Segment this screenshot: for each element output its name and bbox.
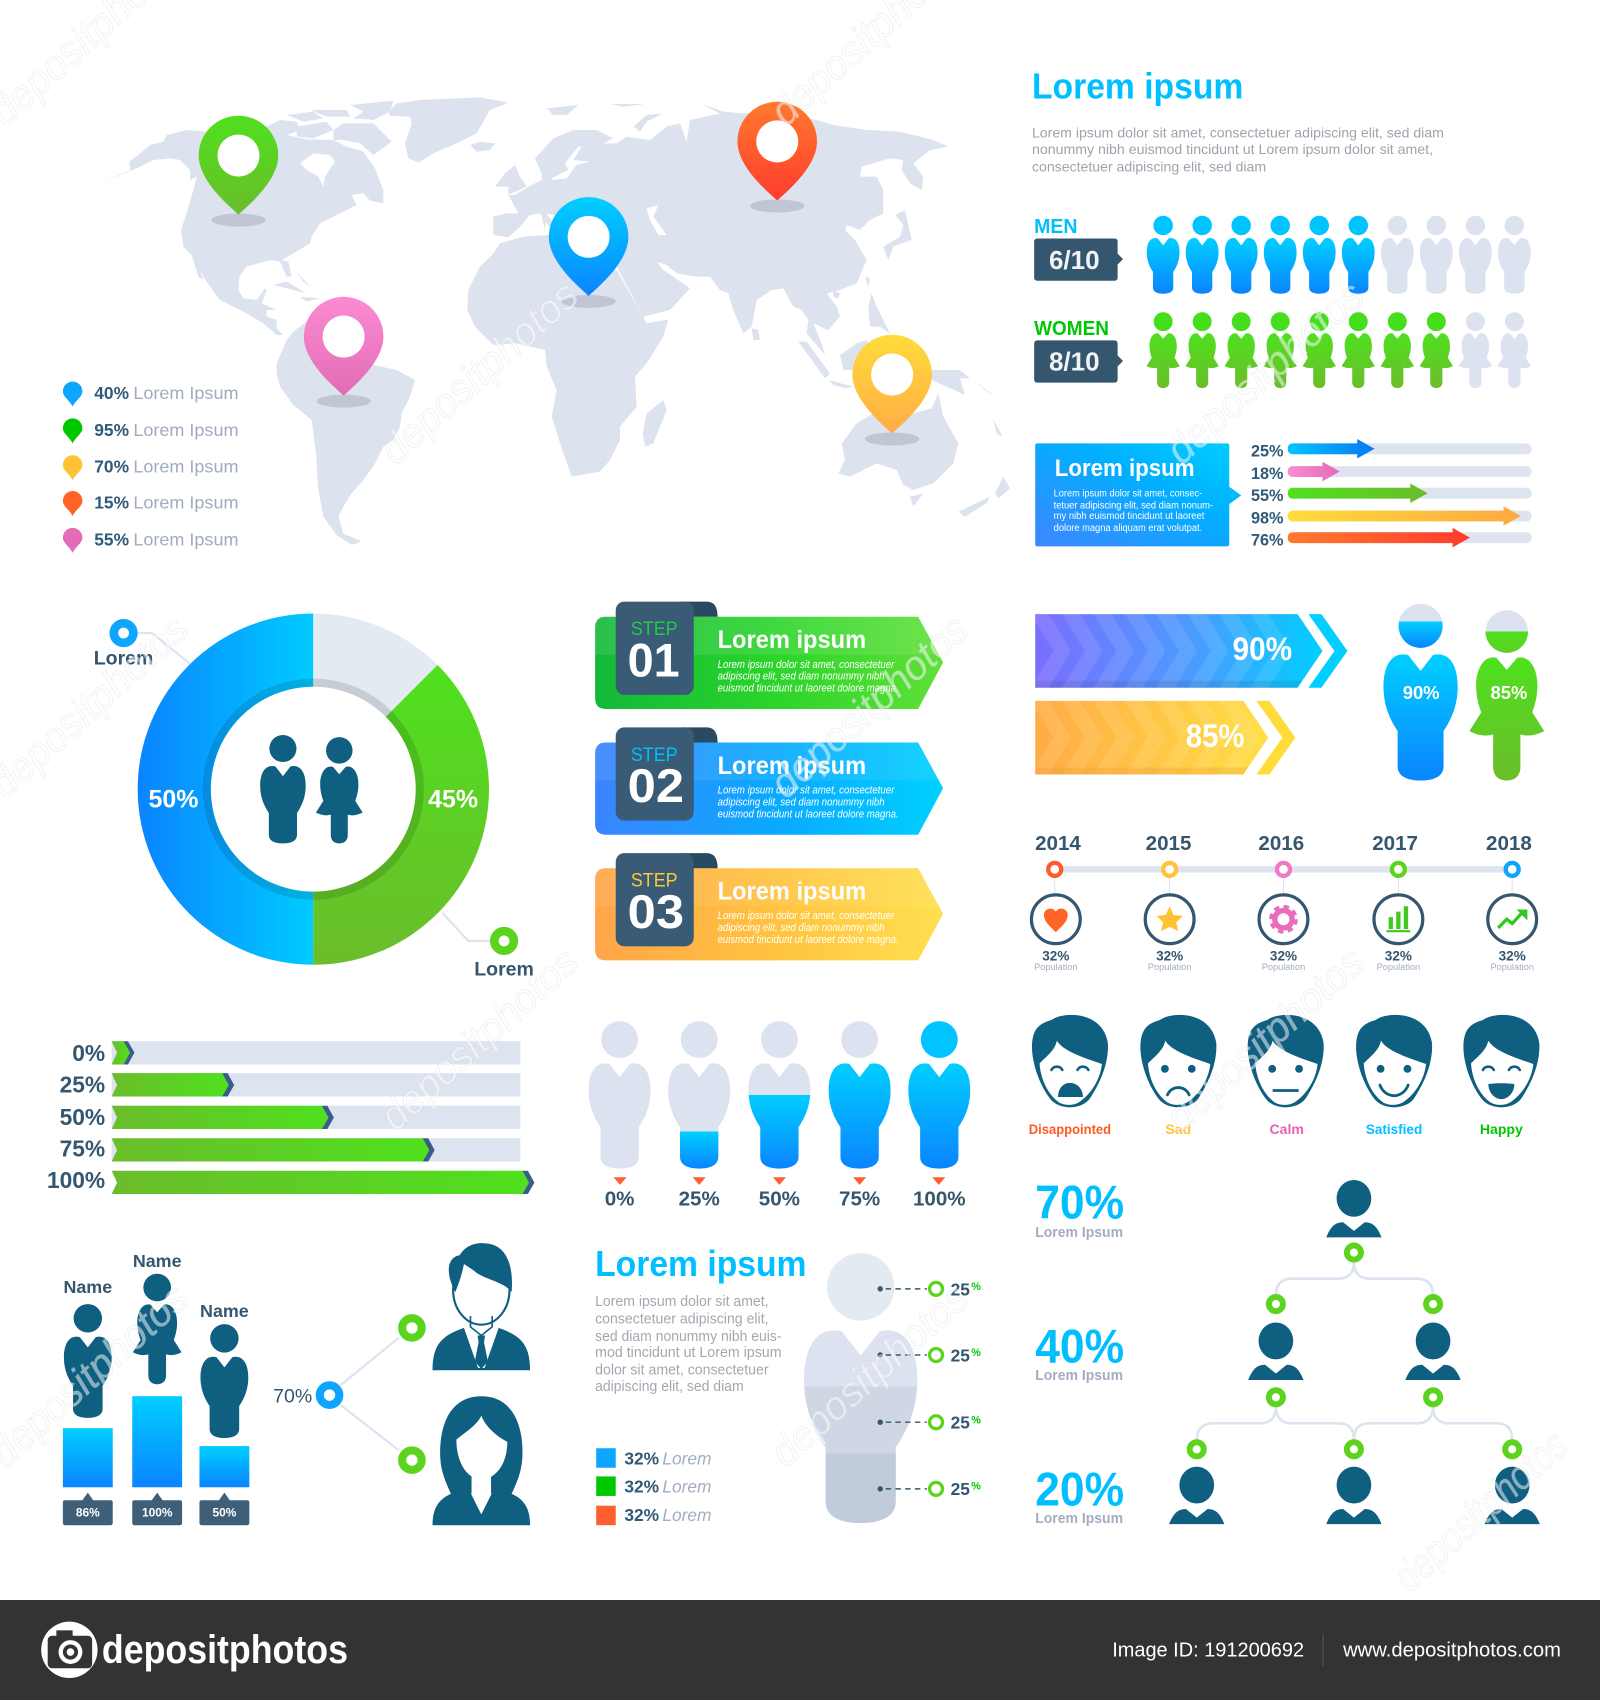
- value 85%: 85%: [1186, 718, 1245, 754]
- women icons: [1146, 312, 1531, 388]
- tab: [616, 602, 718, 695]
- label 45%: 45%: [428, 786, 478, 814]
- panel: blue callout box: [1035, 443, 1241, 546]
- image id: Image ID: 191200692: [1112, 1639, 1304, 1661]
- man 75%: 75%: [839, 1187, 880, 1210]
- callout text: tetuer adipiscing elit, sed diam nonum-: [1054, 500, 1213, 511]
- label 70%: 70%: [273, 1386, 312, 1408]
- step text: Lorem ipsum dolor sit amet, consectetuer: [718, 784, 895, 796]
- 2015 item: [1145, 832, 1194, 972]
- callout text: Lorem ipsum dolor sit amet, consec-: [1054, 488, 1202, 499]
- chart: chevron bar 85%: [1035, 700, 1296, 774]
- legend item 15%: Lorem Ipsum: [133, 492, 238, 512]
- green node bottom: [402, 1450, 422, 1470]
- row 50%: 50%: [60, 1104, 105, 1130]
- face happy: Happy: [1480, 1121, 1523, 1137]
- legend blue: 32%: [624, 1448, 659, 1468]
- watermark: depositphotos: [371, 938, 587, 1139]
- donut hole: [211, 687, 416, 892]
- man 50%: 50%: [759, 1187, 800, 1210]
- panel: men pictogram row: [1034, 215, 1531, 294]
- panel: step 03: [595, 853, 943, 960]
- tab: [616, 727, 718, 821]
- bar person B: 100%: [142, 1506, 173, 1520]
- stat block 20%: 20%: [1035, 1464, 1124, 1517]
- callout 4: 25: [951, 1479, 970, 1499]
- stat block 70%: Lorem Ipsum: [1035, 1224, 1123, 1241]
- label 50%: 50%: [148, 786, 198, 814]
- donut segment blue: [138, 614, 313, 965]
- bar person A: [63, 1277, 113, 1525]
- bar person C: 50%: [212, 1506, 237, 1520]
- watermark: depositphotos: [761, 606, 977, 807]
- man 0%: [589, 1021, 651, 1210]
- value: 90%: [1403, 682, 1440, 703]
- inner shadow ring: [203, 679, 424, 900]
- step text: [718, 910, 899, 946]
- footer divider: [1322, 1634, 1324, 1666]
- legend item 95%: [63, 418, 238, 443]
- row 75%: 75%: [60, 1136, 105, 1162]
- step number: 03: [628, 886, 684, 939]
- chart: filling men: [589, 1021, 970, 1210]
- person middle left: [1248, 1322, 1304, 1380]
- bar person A: 86%: [76, 1506, 100, 1520]
- value 90%: 90%: [1233, 631, 1292, 667]
- callout 3: %: [971, 1414, 981, 1426]
- value: 85%: [1491, 682, 1527, 703]
- 2017 item: 2017: [1372, 832, 1418, 855]
- website: www.depositphotos.com: [1342, 1639, 1561, 1661]
- bar person C: [199, 1301, 249, 1525]
- bar 25%: [1251, 439, 1532, 460]
- 2018 item: [1486, 832, 1537, 972]
- callout 1: 25: [951, 1279, 970, 1299]
- step text: Lorem ipsum dolor sit amet, consectetuer: [718, 659, 895, 671]
- chart: segmented person: [804, 1253, 981, 1523]
- blue node: [320, 1385, 339, 1405]
- legend item 70%: [63, 455, 238, 480]
- bar 76%: 76%: [1251, 531, 1284, 549]
- step title: Lorem ipsum: [718, 626, 866, 654]
- step text: adipiscing elit, sed diam nonummy nibh: [718, 796, 885, 808]
- row 25%: 25%: [60, 1072, 105, 1098]
- watermark: depositphotos: [761, 1275, 977, 1476]
- node top left: [94, 623, 153, 669]
- 2017 item: [1372, 832, 1423, 972]
- connectors: [1197, 1263, 1512, 1440]
- legend blue: [596, 1448, 711, 1468]
- stat block 40%: 40%: [1035, 1321, 1124, 1374]
- bar person A: Name: [63, 1277, 112, 1297]
- legend green: [596, 1476, 711, 1497]
- label MEN: MEN: [1034, 215, 1078, 238]
- 2018 item: 2018: [1486, 832, 1532, 855]
- step number: 02: [628, 760, 684, 813]
- step label: STEP: [631, 870, 678, 892]
- text block: middle paragraph: mod tincidunt ut Lorem ipsum: [595, 1345, 782, 1361]
- 2014 item: 32%: [1042, 948, 1069, 963]
- legend item 95%: Lorem Ipsum: [133, 420, 238, 440]
- donut segment green: [313, 665, 489, 965]
- legend item 40%: [63, 382, 238, 407]
- step text: adipiscing elit, sed diam nonummy nibh: [718, 922, 885, 934]
- heading: middle title: Lorem ipsum: [595, 1244, 807, 1284]
- callout 2: 25: [951, 1346, 970, 1366]
- callout 3: 25: [951, 1413, 970, 1433]
- text block: middle paragraph: consectetuer adipiscing elit,: [595, 1312, 769, 1328]
- callout text: my nibh euismod tincidunt ut laoreet: [1054, 511, 1204, 522]
- step number: 01: [628, 634, 680, 687]
- 2015 item: 2015: [1146, 832, 1191, 855]
- bar person B: Name: [133, 1251, 182, 1271]
- node bottom right: Lorem: [474, 959, 534, 981]
- chart: name bars with people: [63, 1251, 249, 1525]
- stat block 70%: 70%: [1035, 1176, 1124, 1229]
- 2015 item: Population: [1148, 962, 1191, 972]
- text block: intro paragraph: nonummy nibh euismod tincidunt ut Lorem ipsum dolor sit amet,: [1032, 141, 1433, 157]
- legend item 55%: [63, 528, 238, 553]
- center man: [260, 735, 306, 843]
- legend item 15%: 15%: [94, 492, 129, 512]
- text block: intro paragraph: Lorem ipsum dolor sit amet, consectetuer adipiscing elit, sed diam: [1032, 125, 1444, 141]
- logo wordmark: depositphotos: [102, 1628, 348, 1672]
- stat block 40%: Lorem Ipsum: [1035, 1367, 1123, 1384]
- face sad: [1140, 1015, 1216, 1137]
- 2014 item: [1031, 832, 1081, 972]
- donut segment grey: [313, 614, 438, 789]
- man 75%: [829, 1021, 891, 1210]
- center woman: [316, 737, 363, 843]
- row 75%: [60, 1136, 520, 1162]
- 2016 item: [1258, 832, 1308, 972]
- badge 6/10: 6/10: [1049, 245, 1100, 275]
- man 0%: 0%: [605, 1187, 634, 1210]
- man 25%: [668, 1021, 730, 1210]
- text block: middle paragraph: dolor sit amet, consectetuer: [595, 1363, 769, 1379]
- chart: donut: [94, 614, 534, 981]
- pin: red: [737, 102, 817, 212]
- step label: STEP: [631, 618, 678, 640]
- step text: [718, 784, 899, 820]
- badge 6/10: [1034, 238, 1123, 281]
- row 25%: [60, 1072, 520, 1098]
- chart: arrow progress bars: [1251, 439, 1532, 549]
- bar 18%: [1251, 462, 1532, 483]
- logo camera icon: [41, 1622, 98, 1678]
- 2016 item: 2016: [1258, 832, 1304, 855]
- legend blue: Lorem: [662, 1448, 711, 1468]
- watermark: depositphotos: [1157, 272, 1373, 473]
- panel: women pictogram row: [1034, 312, 1531, 388]
- bar 76%: [1251, 528, 1532, 549]
- legend item 95%: 95%: [94, 420, 129, 440]
- person bottom left: [1169, 1467, 1224, 1524]
- 2016 item: Population: [1262, 962, 1305, 972]
- bar 98%: [1251, 506, 1532, 528]
- 2015 item: 32%: [1156, 948, 1183, 963]
- step title: Lorem ipsum: [718, 752, 866, 780]
- 2014 item: 2014: [1035, 832, 1081, 855]
- text block: middle paragraph: adipiscing elit, sed diam: [595, 1379, 744, 1395]
- map legend: [63, 382, 238, 553]
- person bottom right: [1485, 1467, 1540, 1524]
- bar 18%: 18%: [1251, 465, 1284, 483]
- pin: yellow: [852, 335, 932, 446]
- step label: STEP: [631, 744, 678, 766]
- bar person B: [132, 1251, 182, 1525]
- legend item 55%: 55%: [94, 529, 129, 549]
- legend red: [596, 1505, 711, 1525]
- callout text: [1054, 488, 1213, 534]
- person figure: [804, 1253, 917, 1523]
- watermark: depositphotos: [1384, 1421, 1576, 1600]
- tab: [616, 853, 718, 946]
- legend item 15%: [63, 491, 238, 516]
- 2017 item: 32%: [1385, 948, 1412, 963]
- callout 3: [878, 1413, 981, 1433]
- 2014 item: Population: [1034, 962, 1078, 972]
- row 0%: [72, 1040, 520, 1066]
- face satisfied: [1356, 1015, 1432, 1137]
- row 0%: 0%: [72, 1040, 105, 1066]
- node top left: Lorem: [94, 647, 153, 669]
- portrait woman: [433, 1396, 530, 1525]
- heading: top right title: Lorem ipsum: [1032, 67, 1243, 107]
- legend item 55%: Lorem Ipsum: [133, 529, 238, 549]
- step text: adipiscing elit, sed diam nonummy nibh: [718, 671, 885, 683]
- text block: middle paragraph: Lorem ipsum dolor sit amet,: [595, 1294, 769, 1310]
- big woman 85%: [1469, 610, 1544, 780]
- pin: blue: [549, 197, 628, 308]
- nodes: [1190, 1246, 1519, 1456]
- man 100%: [908, 1021, 970, 1210]
- world map: [96, 97, 1010, 545]
- legend red: 32%: [624, 1505, 659, 1525]
- row 50%: [60, 1104, 520, 1130]
- panel: mood faces: [1029, 1015, 1539, 1137]
- callout 2: %: [971, 1347, 981, 1359]
- row 100%: [47, 1167, 534, 1194]
- stat block 20%: Lorem Ipsum: [1035, 1510, 1123, 1527]
- callout text: dolore magna aliquam erat volutpat.: [1054, 523, 1202, 534]
- bar 25%: 25%: [1251, 442, 1284, 460]
- step text: euismod tincidunt ut laoreet dolore magna.: [718, 934, 899, 946]
- label WOMEN: WOMEN: [1034, 317, 1109, 340]
- panel: portraits: [273, 1243, 530, 1525]
- person bottom center: [1326, 1467, 1382, 1524]
- color legend: [596, 1448, 711, 1525]
- 2017 item: Population: [1377, 962, 1420, 972]
- face disappointed: [1029, 1015, 1111, 1137]
- text block: middle paragraph: [595, 1294, 782, 1395]
- callout 2: [878, 1346, 981, 1366]
- person middle right: [1405, 1322, 1461, 1380]
- bar 55%: [1251, 483, 1532, 505]
- face calm: [1248, 1015, 1324, 1137]
- green node top: [402, 1318, 422, 1338]
- face sad: Sad: [1165, 1121, 1191, 1137]
- face happy: [1463, 1015, 1539, 1137]
- footer bar: [0, 1600, 1600, 1700]
- 2016 item: 32%: [1270, 948, 1297, 963]
- callout 4: [878, 1479, 981, 1499]
- man 100%: 100%: [913, 1187, 966, 1210]
- chart: chevron bar 90%: [1035, 614, 1348, 688]
- text block: intro paragraph: consectetuer adipiscing elit, sed diam: [1032, 158, 1266, 174]
- portrait man: [433, 1243, 530, 1370]
- bar person C: Name: [200, 1301, 249, 1321]
- step text: Lorem ipsum dolor sit amet, consectetuer: [718, 910, 895, 922]
- panel: step 01: [595, 602, 943, 709]
- callout 1: %: [971, 1281, 981, 1293]
- callout 1: [878, 1279, 981, 1299]
- legend item 40%: Lorem Ipsum: [133, 383, 238, 403]
- 2018 item: Population: [1490, 962, 1534, 972]
- step text: euismod tincidunt ut laoreet dolore magna.: [718, 683, 899, 695]
- legend item 70%: 70%: [94, 457, 129, 477]
- chart: progress bars green: [47, 1040, 534, 1194]
- legend green: Lorem: [662, 1477, 711, 1497]
- callout 4: %: [971, 1480, 981, 1492]
- person top: [1326, 1180, 1382, 1237]
- face satisfied: Satisfied: [1366, 1121, 1422, 1137]
- face calm: Calm: [1270, 1121, 1304, 1137]
- bar 98%: 98%: [1251, 510, 1284, 528]
- badge 8/10: [1034, 340, 1123, 383]
- connector lines: [340, 1338, 399, 1450]
- timeline line: [1061, 866, 1512, 873]
- pin: pink: [304, 297, 383, 408]
- chart: timeline: [1031, 832, 1537, 972]
- face disappointed: Disappointed: [1029, 1121, 1111, 1137]
- men icons: [1147, 216, 1531, 294]
- 2018 item: 32%: [1499, 948, 1526, 963]
- legend green: 32%: [624, 1477, 659, 1497]
- pin: green: [199, 116, 278, 227]
- step text: euismod tincidunt ut laoreet dolore magna.: [718, 808, 899, 820]
- node bottom right: [474, 931, 534, 981]
- leader lines: [138, 633, 490, 941]
- legend item 40%: 40%: [94, 383, 129, 403]
- panel: world map with pins: [96, 97, 1010, 545]
- legend red: Lorem: [662, 1505, 711, 1525]
- bar 55%: 55%: [1251, 487, 1284, 505]
- step text: [718, 659, 899, 695]
- man 50%: [748, 1021, 810, 1210]
- watermark: depositphotos: [371, 272, 587, 473]
- man 25%: 25%: [679, 1187, 720, 1210]
- watermark: depositphotos: [1157, 938, 1373, 1139]
- text block: intro paragraph: [1032, 125, 1444, 174]
- step title: Lorem ipsum: [718, 878, 866, 906]
- legend item 70%: Lorem Ipsum: [133, 457, 238, 477]
- big man 90%: [1383, 604, 1458, 780]
- chart: org tree: [1169, 1180, 1540, 1524]
- callout title: Lorem ipsum: [1055, 455, 1195, 482]
- row 100%: 100%: [47, 1167, 105, 1193]
- badge 8/10: 8/10: [1049, 347, 1100, 377]
- panel: step 02: [595, 727, 943, 835]
- text block: middle paragraph: sed diam nonummy nibh euis-: [595, 1329, 782, 1345]
